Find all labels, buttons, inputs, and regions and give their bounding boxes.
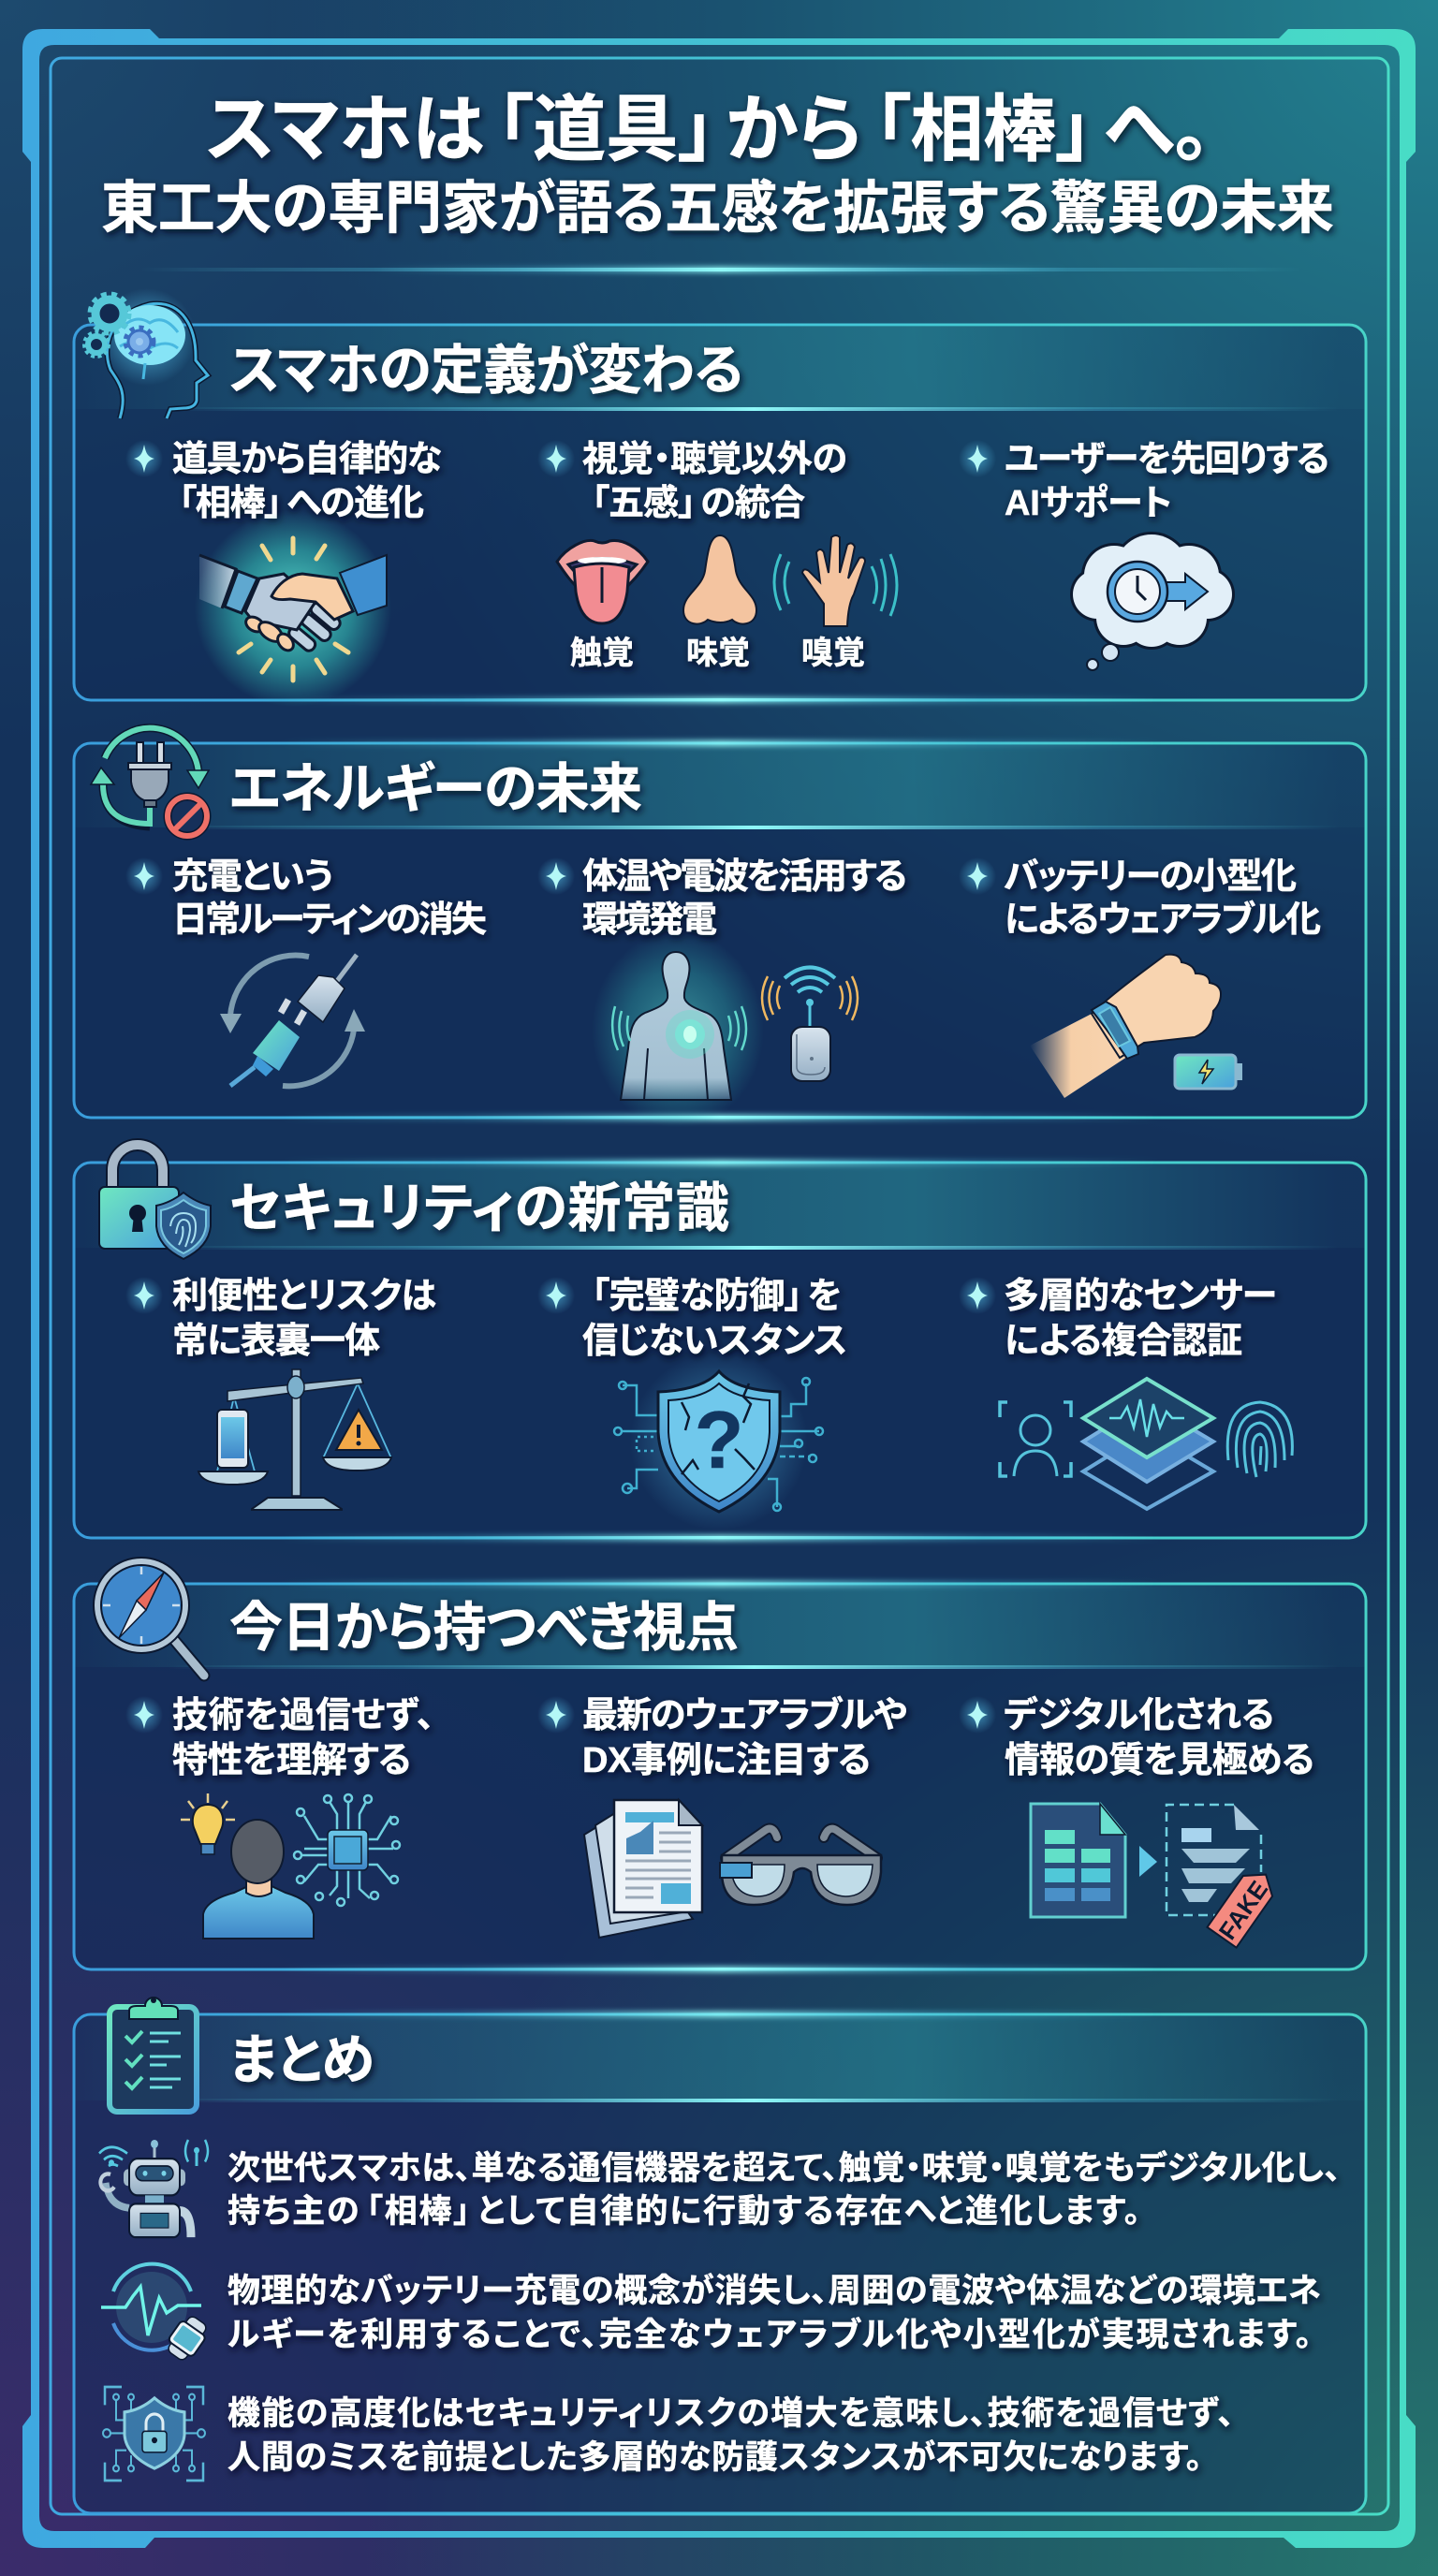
icon: robot <box>99 2140 208 2237</box>
summary text 1 <box>227 2149 1341 2230</box>
bullet: デジタル化される: デジタル化される <box>1004 1695 1274 1735</box>
bullet: 道具から自律的な: 「相棒」への進化 <box>179 484 424 523</box>
bullet: 道具から自律的な <box>125 440 442 523</box>
labels: 触覚 味覚 嗅覚 <box>570 636 865 671</box>
bullet: バッテリーの小型化: によるウェアラブル化 <box>1005 900 1321 940</box>
bullet: 技術を過信せず、 <box>125 1696 434 1780</box>
icon: person with lightbulb and chip <box>181 1793 400 1939</box>
icon: plug with cycle arrows <box>91 728 209 836</box>
bullet: 技術を過信せず、: 特性を理解する <box>172 1741 411 1780</box>
bullet: 最新のウェアラブルや: 最新のウェアラブルや <box>582 1695 907 1735</box>
icon: cracked shield with question mark: ? <box>695 1396 743 1486</box>
bullet: 最新のウェアラブルや <box>537 1695 907 1780</box>
title <box>101 88 1334 240</box>
bullet: 体温や電波を活用する: 環境発電 <box>582 900 717 940</box>
bullet: バッテリーの小型化 <box>959 857 1321 940</box>
icon: nose <box>683 535 756 624</box>
bullet: バッテリーの小型化: バッテリーの小型化 <box>1004 857 1297 897</box>
labels: 触覚 味覚 嗅覚: 味覚 <box>686 636 750 671</box>
icon: pulse and watch <box>101 2264 212 2364</box>
bullet: 多層的なセンサー: による複合認証 <box>1005 1322 1242 1361</box>
summary text 3: 機能の高度化はセキュリティリスクの増大を意味し、技術を過信せず、 <box>227 2395 1234 2432</box>
bullet: 最新のウェアラブルや: DX事例に注目する <box>582 1741 871 1780</box>
bullet: 「完璧な防御」を <box>537 1277 847 1361</box>
summary text 2 <box>227 2273 1321 2353</box>
bullet: 利便性とリスクは <box>125 1277 436 1361</box>
title: 東工大の専門家が語る五感を拡張する驚異の未来 <box>101 176 1334 240</box>
icon: data document to fake document <box>1031 1804 1281 1948</box>
icon: balance scale <box>198 1369 391 1510</box>
bullet: 技術を過信せず、: 技術を過信せず、 <box>172 1696 434 1735</box>
icon: smart glasses <box>720 1829 881 1905</box>
icon: thought cloud with clock <box>1070 532 1235 670</box>
bullet: 道具から自律的な: 道具から自律的な <box>172 440 442 479</box>
summary text 3 <box>227 2395 1234 2476</box>
bullet: 多層的なセンサー: 多層的なセンサー <box>1004 1277 1277 1316</box>
heading: 今日から持つべき視点 <box>229 1598 739 1658</box>
bullet: 視覚・聴覚以外の: 「五感」の統合 <box>592 484 805 523</box>
panel: エネルギーの未来 <box>74 728 1366 1128</box>
icon: cracked shield with question mark <box>614 1353 823 1530</box>
icon: tongue <box>557 540 648 623</box>
bullet: 体温や電波を活用する <box>537 857 907 940</box>
bullet: 多層的なセンサー <box>959 1277 1277 1361</box>
bullet: 視覚・聴覚以外の: 視覚・聴覚以外の <box>582 440 847 479</box>
labels: 触覚 味覚 嗅覚: 触覚 <box>570 636 634 671</box>
icon: hand with waves <box>774 535 897 626</box>
heading: エネルギーの未来 <box>229 759 642 819</box>
bullet: ユーザーを先回りする <box>959 440 1329 523</box>
bullet: ユーザーを先回りする: AIサポート <box>1005 484 1172 523</box>
icon: brain with gears <box>84 288 208 418</box>
bullet: 利便性とリスクは: 利便性とリスクは <box>172 1277 436 1316</box>
summary text 1: 次世代スマホは、単なる通信機器を超えて、触覚・味覚・嗅覚をもデジタル化し、 <box>227 2149 1341 2187</box>
heading: まとめ <box>229 2030 374 2090</box>
title: スマホは「道具」から「相棒」へ。 <box>206 88 1211 170</box>
panel: スマホの定義が変わる <box>74 288 1366 707</box>
icon: magnifier with compass <box>97 1561 204 1676</box>
panel: セキュリティの新常識 <box>74 1145 1366 1541</box>
bullet: 充電という: 充電という <box>172 857 333 897</box>
icon: clipboard <box>110 1998 197 2112</box>
icon: shield with lock and circuits <box>103 2387 205 2481</box>
bullet: 利便性とリスクは: 常に表裏一体 <box>172 1322 380 1361</box>
heading: スマホの定義が変わる <box>229 341 743 401</box>
bullet: 体温や電波を活用する: 体温や電波を活用する <box>582 857 907 897</box>
icon: documents <box>584 1800 702 1938</box>
heading: セキュリティの新常識 <box>229 1178 729 1238</box>
icon: multi-layer biometric sensors <box>1000 1379 1292 1509</box>
summary text 3: 人間のミスを前提とした多層的な防護スタンスが不可欠になります。 <box>227 2439 1202 2476</box>
labels: 触覚 味覚 嗅覚: 嗅覚 <box>801 636 865 671</box>
icon: body heat and radio device <box>592 931 858 1128</box>
bullet: 視覚・聴覚以外の <box>537 440 847 523</box>
summary text 1: 持ち主の「相棒」として自律的に行動する存在へと進化します。 <box>227 2193 1140 2230</box>
icon: handshake <box>195 510 391 707</box>
icon: padlock and fingerprint shield <box>99 1145 211 1259</box>
bullet: 「完璧な防御」を: 「完璧な防御」を <box>592 1277 842 1316</box>
summary text 2: 物理的なバッテリー充電の概念が消失し、周囲の電波や体温などの環境エネ <box>227 2273 1321 2309</box>
bullet: デジタル化される: 情報の質を見極める <box>1005 1741 1314 1780</box>
summary text 2: ルギーを利用することで、完全なウェアラブル化や小型化が実現されます。 <box>227 2316 1312 2353</box>
icon: wrist with wearable and battery <box>1030 955 1242 1098</box>
panel: まとめ <box>74 1998 1366 2513</box>
bullet: 「完璧な防御」を: 信じないスタンス <box>582 1322 847 1361</box>
bullet: ユーザーを先回りする: ユーザーを先回りする <box>1005 440 1329 479</box>
icon: data document to fake document: FAKE <box>1213 1876 1273 1945</box>
bullet: デジタル化される <box>959 1695 1314 1780</box>
panel: 今日から持つべき視点 <box>74 1561 1366 1972</box>
bullet: 充電という <box>125 857 487 940</box>
bullet: 充電という: 日常ルーティンの消失 <box>172 900 487 940</box>
icon: unplugged plugs with arrows <box>220 955 365 1086</box>
